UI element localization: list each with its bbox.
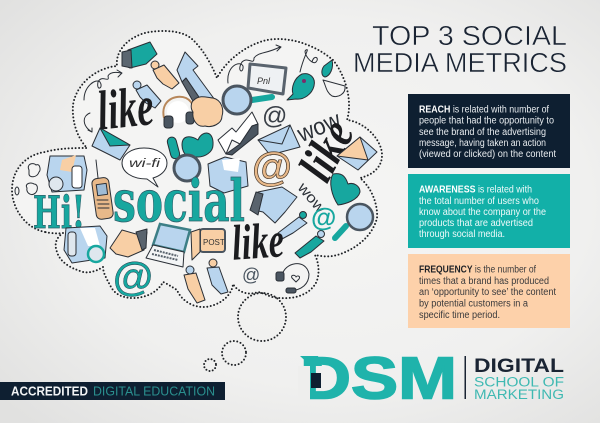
icon: peach person low	[184, 266, 205, 303]
panel: reach: REACH is related with number of	[419, 104, 549, 116]
footer banner: DIGITAL EDUCATION	[93, 384, 215, 398]
icon: teal at sign: @	[311, 202, 336, 232]
thought cloud outline	[12, 31, 382, 307]
logo: DSM: DSM	[300, 346, 457, 412]
icon: blue person right	[278, 212, 307, 239]
thought bubble small	[204, 359, 216, 371]
panel: awareness: products that are advertised	[419, 218, 533, 229]
panel: frequency	[408, 254, 570, 328]
like script top left: like	[94, 75, 156, 143]
icon: small scribble clouds	[15, 164, 40, 195]
hi text: Hi!	[33, 186, 85, 239]
icon: envelope teal and blue	[92, 128, 130, 160]
social text: social	[113, 167, 245, 235]
panel: reach: message, having taken an action	[419, 138, 546, 149]
wow text top: wow	[293, 106, 345, 148]
icon: blue person low	[207, 259, 228, 294]
logo: DSM: SCHOOL OF	[474, 374, 564, 390]
icon: teal person	[295, 230, 324, 258]
title: TOP 3 SOCIAL	[372, 20, 567, 51]
icon: teal drop	[322, 60, 333, 77]
icon: at sign peach: @	[252, 145, 292, 189]
icon: teal hand top	[122, 42, 157, 68]
icon: camera lower	[64, 226, 107, 263]
panel: reach: people that had the opportunity to	[419, 116, 554, 127]
icon: teal pill	[166, 136, 181, 160]
speech bubble wi-fi	[122, 148, 167, 187]
icon: headset	[276, 264, 309, 293]
like script centre rotated: like	[287, 111, 365, 190]
logo: DSM: MARKETING	[474, 387, 564, 402]
icon: big blue arrow	[177, 52, 215, 110]
title: MEDIA METRICS	[353, 47, 567, 78]
icon: peach person	[151, 61, 179, 89]
speech bubble small	[323, 80, 345, 97]
panel: awareness: the total number of users who	[419, 196, 539, 207]
panel: awareness: through social media.	[419, 229, 505, 240]
thought bubble large	[238, 293, 286, 341]
icon: laptop	[146, 224, 190, 267]
icon: post sign	[200, 229, 225, 252]
icon: camera upper	[208, 157, 248, 193]
title	[353, 20, 567, 78]
like script lower: like	[230, 211, 286, 271]
panel: frequency: by potential customers in a	[419, 298, 528, 310]
wow text vertical: wow	[293, 179, 329, 217]
icon: camera left	[47, 155, 87, 192]
panel: frequency: times that a brand has produced	[419, 276, 549, 287]
panel: frequency: FREQUENCY is the number of	[419, 264, 536, 276]
panel: awareness	[408, 174, 570, 248]
icon: at sign outline: @	[262, 102, 287, 130]
icon: peach figure behind post	[191, 229, 200, 260]
icon: tablet frame: Pnl	[257, 76, 271, 86]
panel: frequency: specific time period.	[419, 310, 500, 321]
logo: DSM: DIGITAL	[474, 356, 564, 377]
icon: teal at sign lower: @	[113, 255, 153, 299]
icon: tablet frame	[248, 64, 286, 94]
icon: small at sign: @	[242, 265, 260, 285]
icon: teal heart right	[331, 174, 360, 205]
icon: post sign: POST	[203, 238, 225, 247]
icon: magnifier top	[223, 86, 272, 114]
footer banner	[0, 382, 225, 400]
icon: headphones	[163, 97, 194, 128]
footer banner: ACCREDITED	[11, 384, 88, 398]
icon: white arrow	[218, 112, 258, 155]
icon: big blue glove	[250, 187, 297, 223]
icon: mobile phone	[91, 160, 114, 220]
icon: teal heart centre	[182, 133, 213, 157]
icon: envelope blue	[258, 125, 300, 155]
icon: envelope peach	[337, 137, 377, 170]
icon: magnifier left	[174, 155, 200, 181]
thought cloud illustration	[12, 31, 382, 371]
panel: awareness: know about the company or the	[419, 207, 546, 218]
thought bubble medium	[222, 341, 246, 365]
panel: reach: see the brand of the advertising	[419, 127, 546, 138]
icon: magnifier right	[335, 204, 373, 238]
panel: frequency: an ‘opportunity to see’ the content	[419, 287, 556, 298]
speech bubble wi-fi: wi-fi	[129, 156, 160, 170]
panel: reach: (viewed or clicked) on the content	[419, 149, 556, 160]
panel: awareness: AWARENESS is related with	[419, 184, 532, 196]
icon: swirl arrow top right	[228, 45, 281, 83]
icon: peach hand	[110, 229, 147, 257]
icon: scribble loop	[300, 50, 317, 72]
icon: curve arrow	[84, 113, 92, 132]
icon: swirl arrow left	[84, 70, 122, 100]
icon: twitter bird	[287, 74, 314, 100]
panel: reach	[408, 94, 570, 168]
logo: DSM	[298, 346, 564, 412]
icon: peach splat	[191, 97, 223, 127]
icon: blue person	[133, 81, 161, 108]
